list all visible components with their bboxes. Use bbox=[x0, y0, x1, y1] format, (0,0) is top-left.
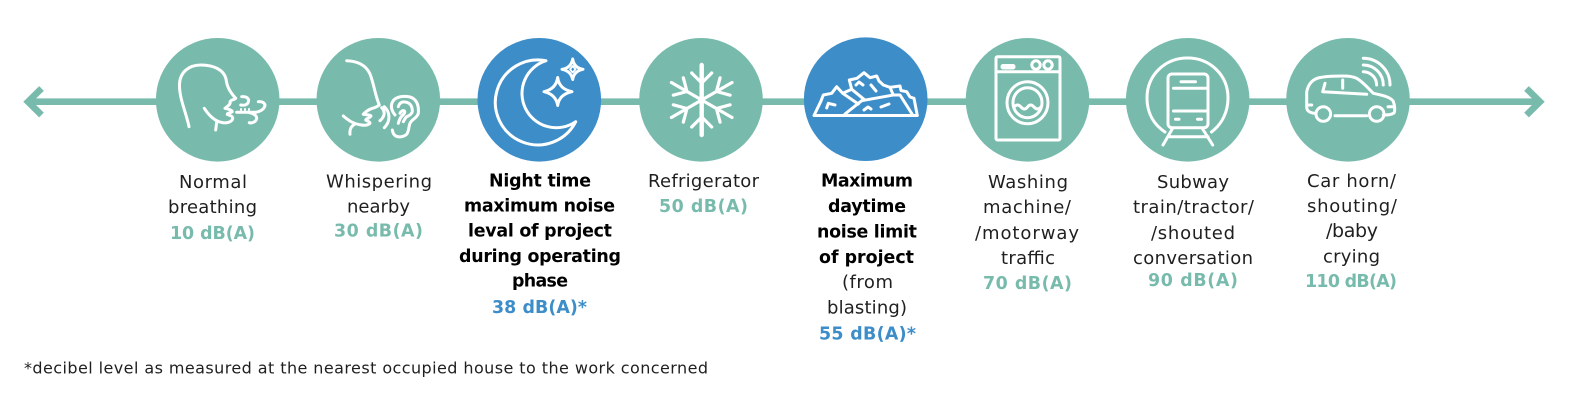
item: normal breathing label: Normal bbox=[179, 172, 247, 193]
item: maximum daytime label bbox=[817, 172, 917, 344]
item: car horn label: crying bbox=[1323, 246, 1380, 268]
item: subway label: /shouted bbox=[1151, 223, 1235, 244]
item: whispering label: 30 dB(A) bbox=[334, 222, 423, 242]
item: whispering label: nearby bbox=[347, 196, 410, 218]
item: washing machine label: Washing bbox=[988, 172, 1068, 193]
timeline double-headed arrow bbox=[28, 88, 1540, 115]
item: washing machine label: traffic bbox=[1001, 248, 1055, 269]
item: normal breathing label: breathing bbox=[168, 197, 257, 218]
item: car horn label: shouting/ bbox=[1307, 196, 1398, 217]
item: car horn label: /baby bbox=[1326, 220, 1378, 242]
item: refrigerator label: 50 dB(A) bbox=[659, 197, 748, 217]
item: maximum daytime label: (from bbox=[842, 272, 893, 293]
item: car horn icon bbox=[1286, 38, 1410, 162]
item: washing machine label: /motorway bbox=[975, 223, 1079, 244]
item: maximum daytime label: noise limit bbox=[817, 222, 917, 242]
item: normal breathing label bbox=[168, 172, 257, 244]
item: subway train icon bbox=[1126, 38, 1249, 162]
item: refrigerator label bbox=[648, 171, 760, 217]
item: car horn label bbox=[1305, 171, 1398, 292]
item: maximum daytime label: blasting) bbox=[827, 298, 907, 318]
item: whispering icon bbox=[316, 38, 440, 162]
item: subway label: conversation bbox=[1133, 248, 1253, 269]
item: subway label: Subway bbox=[1157, 172, 1229, 193]
item: night time label: maximum noise bbox=[464, 196, 615, 216]
item: car horn label: 110 dB(A) bbox=[1305, 272, 1397, 292]
item: washing machine label: 70 dB(A) bbox=[983, 274, 1072, 294]
item: maximum daytime label: 55 dB(A)* bbox=[819, 324, 916, 344]
item: washing machine icon bbox=[966, 38, 1089, 162]
item: night time label: leval of project bbox=[468, 222, 612, 242]
item: washing machine label bbox=[975, 172, 1079, 294]
item: subway label bbox=[1133, 172, 1255, 291]
item: whispering label: Whispering bbox=[326, 172, 432, 192]
item: maximum daytime label: daytime bbox=[828, 197, 906, 217]
item: maximum daytime rocks icon bbox=[804, 37, 928, 161]
item: night time label: 38 dB(A)* bbox=[492, 298, 587, 318]
item: subway label: train/tractor/ bbox=[1133, 197, 1255, 218]
item: maximum daytime label: of project bbox=[819, 248, 914, 268]
item: night time label: Night time bbox=[489, 172, 591, 192]
item: night time label: phase bbox=[512, 272, 568, 292]
footnote: *decibel level as measured at the nearest occupied house to the work concerned bbox=[24, 358, 708, 378]
item: maximum daytime label: Maximum bbox=[821, 172, 913, 192]
item: whispering label bbox=[326, 172, 432, 242]
item: car horn label: Car horn/ bbox=[1307, 171, 1397, 192]
item: washing machine label: machine/ bbox=[983, 197, 1072, 218]
item: refrigerator label: Refrigerator bbox=[648, 171, 760, 192]
item: normal breathing icon bbox=[156, 38, 280, 162]
item: night time moon icon bbox=[478, 38, 601, 162]
item: subway label: 90 dB(A) bbox=[1148, 271, 1238, 291]
item: night time label bbox=[459, 172, 621, 318]
item: normal breathing label: 10 dB(A) bbox=[170, 224, 255, 244]
item: night time label: during operating bbox=[459, 247, 621, 267]
item: refrigerator snowflake icon bbox=[639, 38, 763, 162]
